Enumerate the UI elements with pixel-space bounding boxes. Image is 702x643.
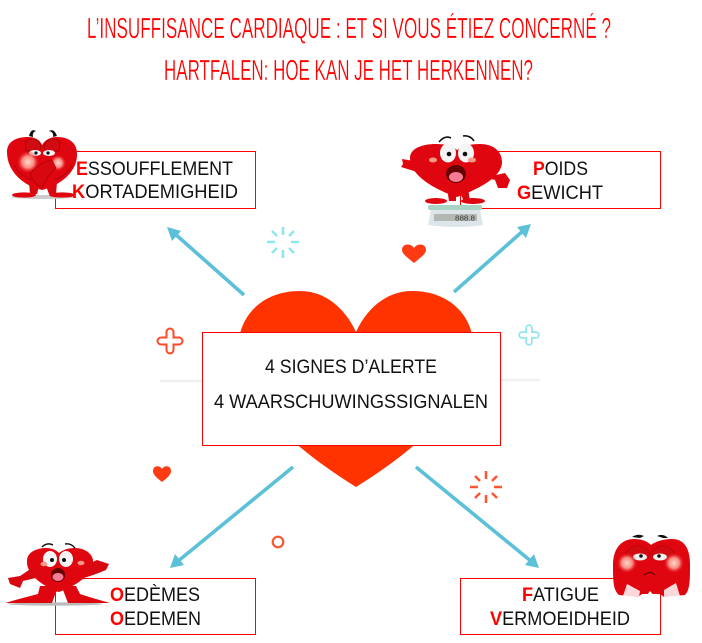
central large heart <box>238 291 474 487</box>
arrow: top left <box>167 227 244 295</box>
character: heart with oedema <box>5 544 110 606</box>
label: poids: POIDS <box>533 158 588 180</box>
label: essoufflement: ESSOUFFLEMENT <box>76 158 233 180</box>
character: heart on scale: 888.8 <box>455 216 475 222</box>
label: essoufflement <box>72 158 238 203</box>
panel: centre box <box>202 332 500 446</box>
character: breathless heart <box>7 130 77 199</box>
box: top right <box>460 152 660 208</box>
label: fatigue: VERMOEIDHEID <box>490 608 630 630</box>
label: poids <box>517 158 603 204</box>
box: bottom left <box>56 578 256 634</box>
panel: centre box: 4 SIGNES D’ALERTE <box>265 356 437 378</box>
decorative icon: red heart top <box>402 244 426 263</box>
arrow: bottom right <box>416 467 539 568</box>
label: oedemes <box>110 583 201 630</box>
decorative icon: red sparkle <box>470 471 502 503</box>
box: top left <box>56 152 256 208</box>
label: poids: GEWICHT <box>517 182 603 204</box>
label: oedemes: OEDÈMES <box>110 583 200 606</box>
decorative icon: red plus <box>161 332 179 350</box>
label: oedemes: OEDEMEN <box>110 608 201 630</box>
horizontal baseline <box>160 380 540 381</box>
title <box>87 12 611 87</box>
decorative icon: red ring <box>273 537 283 547</box>
label: fatigue: FATIGUE <box>522 584 599 606</box>
label: essoufflement: KORTADEMIGHEID <box>72 181 238 203</box>
arrow: bottom left <box>170 467 293 568</box>
box: bottom right <box>460 578 660 634</box>
panel: centre box: 4 WAARSCHUWINGSSIGNALEN <box>214 391 488 413</box>
arrow: top right <box>454 224 531 292</box>
decorative icon: small red heart left <box>153 466 171 482</box>
character: tired heart <box>613 535 690 598</box>
label: fatigue <box>490 584 630 630</box>
character: heart on scale <box>401 136 510 227</box>
decorative icon: cyan sparkle <box>267 227 299 258</box>
decorative icon: cyan plus <box>522 328 536 342</box>
